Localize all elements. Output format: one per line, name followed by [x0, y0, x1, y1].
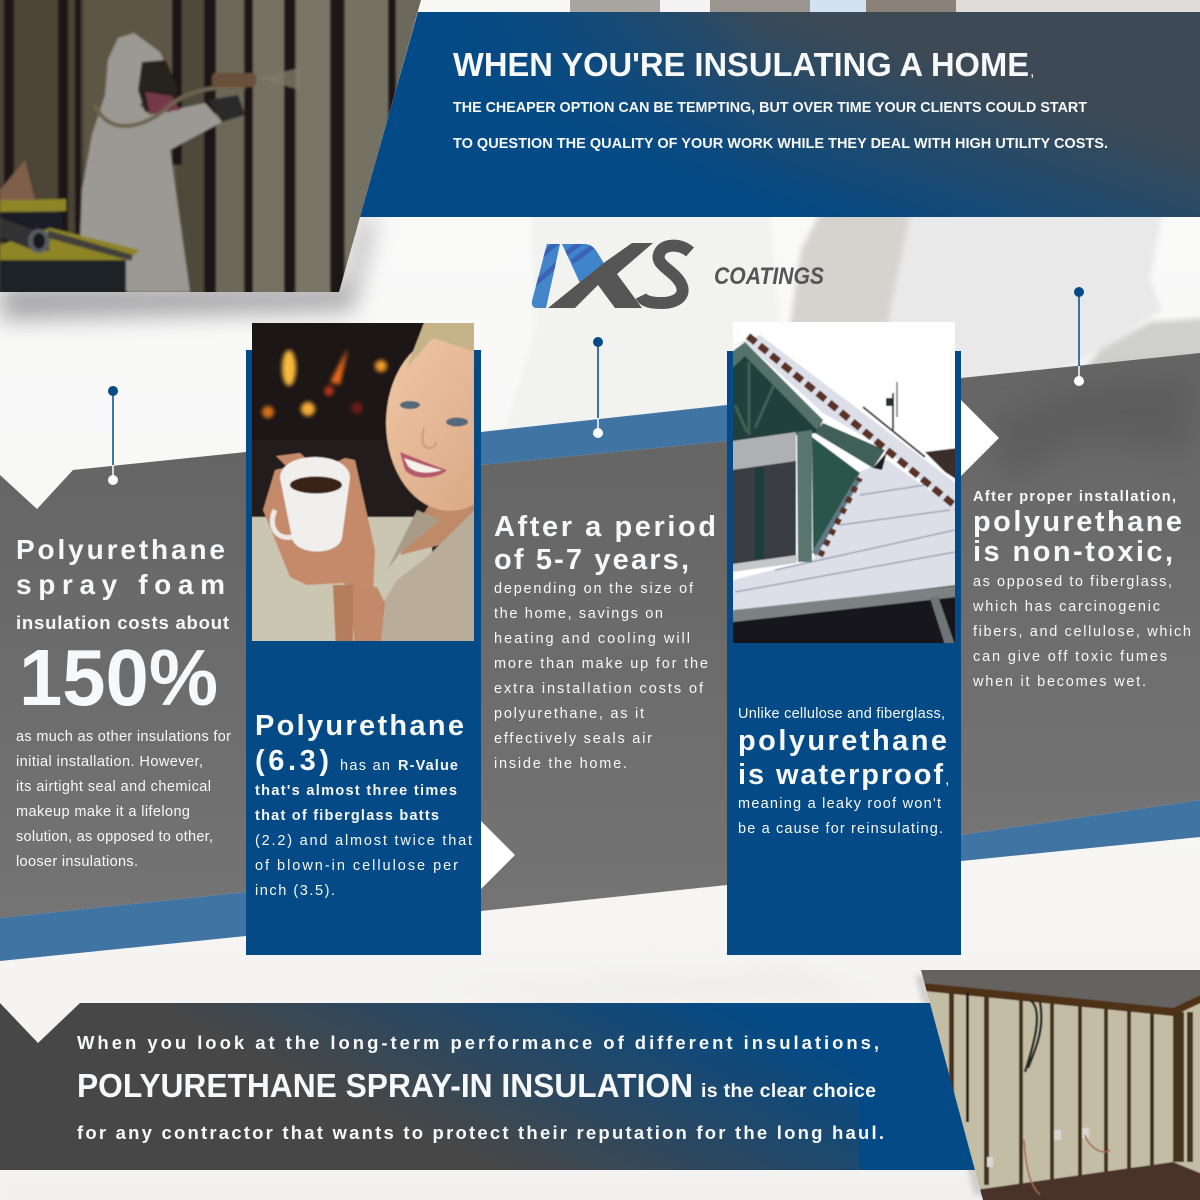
logo mark S: [641, 246, 690, 303]
headline: ,: [1030, 63, 1034, 80]
body text: its airtight seal and chemical: [16, 779, 211, 795]
heading: After proper installation,: [973, 489, 1176, 505]
logo: IXS Coatings: [528, 236, 824, 308]
robe: [380, 510, 474, 641]
body text: when it becomes wet.: [972, 674, 1146, 690]
body text: depending on the size of: [494, 581, 694, 597]
text: POLYURETHANE SPRAY-IN INSULATION: [77, 1067, 693, 1104]
worker: [80, 33, 300, 292]
text: meaning a leaky roof won't: [738, 796, 941, 812]
body text: polyurethane, as it: [494, 706, 644, 722]
body text: [16, 729, 231, 870]
body text: [255, 783, 472, 899]
body text: more than make up for the: [494, 656, 708, 672]
text: is the clear choice: [701, 1080, 876, 1102]
body text: which has carcinogenic: [972, 599, 1160, 615]
body text: as much as other insulations for: [16, 729, 231, 745]
facial features: [400, 401, 468, 478]
heading: spray foam: [16, 569, 225, 600]
connector: [108, 386, 118, 485]
logo mark X grey: [548, 243, 653, 308]
logo mark X blue: [562, 244, 604, 282]
heading: R-Value: [398, 758, 458, 774]
body text: makeup make it a lifelong: [16, 804, 190, 820]
big number: 150%: [19, 633, 218, 722]
body text: of blown-in cellulose per: [255, 858, 458, 874]
text: Unlike cellulose and fiberglass,: [738, 706, 945, 722]
body text: looser insulations.: [16, 854, 138, 870]
body text: that's almost three times: [255, 783, 457, 799]
body text: fibers, and cellulose, which: [973, 624, 1191, 640]
photo drop shadow: [0, 217, 374, 320]
heading: of 5-7 years,: [494, 544, 689, 576]
panel: R-value column: [246, 323, 481, 955]
text: is waterproof: [738, 759, 943, 791]
body text: inch (3.5).: [255, 883, 335, 899]
text: be a cause for reinsulating.: [738, 821, 943, 837]
heading: is non-toxic,: [973, 536, 1173, 568]
body text: extra installation costs of: [494, 681, 704, 697]
text: ,: [945, 771, 949, 788]
blue strip: [961, 800, 1200, 861]
heading: has an: [340, 758, 390, 774]
body text: heating and cooling will: [494, 631, 690, 647]
intro text: THE CHEAPER OPTION CAN BE TEMPTING, BUT OVER TIME YOUR CLIENTS COULD START: [453, 99, 1087, 116]
neck and chest: [400, 504, 474, 556]
blue strip: [481, 405, 727, 465]
text: polyurethane: [738, 725, 947, 757]
top photo strip: [420, 0, 1200, 12]
heading: [973, 489, 1182, 568]
heading: [255, 710, 464, 777]
heading: After a period: [494, 511, 716, 543]
panel: non-toxic grey panel: [961, 287, 1200, 861]
blue strip: [0, 892, 246, 961]
panel: payback grey panel: [481, 337, 727, 911]
body text: as opposed to fiberglass,: [973, 574, 1172, 590]
heading: Polyurethane: [255, 710, 464, 742]
arrow: [481, 821, 515, 889]
text: [77, 1032, 884, 1143]
text: [738, 706, 949, 837]
logo mark I: [532, 244, 560, 308]
text: for any contractor that wants to protect their reputation for the long haul.: [77, 1122, 884, 1143]
body text: inside the home.: [494, 756, 627, 772]
hands and arm: [263, 453, 375, 597]
panel: top headline banner: [360, 12, 1200, 217]
body text: effectively seals air: [494, 731, 652, 747]
hair: [408, 323, 474, 366]
panel: waterproof column: [725, 315, 965, 955]
body text: solution, as opposed to other,: [16, 829, 213, 845]
intro text: TO QUESTION THE QUALITY OF YOUR WORK WHILE THEY DEAL WITH HIGH UTILITY COSTS.: [453, 135, 1108, 152]
yellow bins: [0, 160, 140, 295]
panel: left grey panel: [0, 386, 246, 961]
heading: [494, 511, 716, 576]
headline: WHEN YOU'RE INSULATING A HOME: [453, 46, 1029, 83]
photo: insulated wall: [915, 965, 1200, 1200]
connector: [593, 337, 603, 438]
body text: that of fiberglass batts: [255, 808, 439, 824]
heading: insulation costs about: [16, 612, 229, 633]
heading: [16, 534, 229, 633]
body text: can give off toxic fumes: [973, 649, 1167, 665]
body text: [494, 581, 708, 772]
body text: (2.2) and almost twice that: [255, 833, 472, 849]
logo wordmark: COATINGS: [714, 263, 824, 290]
panel: bottom conclusion banner: [0, 1003, 975, 1170]
heading: (6.3): [255, 745, 329, 777]
body text: [972, 574, 1191, 690]
face: [385, 338, 474, 512]
photo: worker spraying foam: [0, 0, 435, 295]
mug: [272, 457, 350, 552]
body text: initial installation. However,: [16, 754, 203, 770]
photo: woman with coffee: [252, 323, 474, 641]
heading: Polyurethane: [16, 534, 225, 565]
intro text: [453, 99, 1108, 152]
photo: snowy roof: [733, 322, 955, 643]
connector: [1074, 287, 1084, 386]
shadow beside wall photo: [915, 975, 985, 1195]
arrow: [961, 400, 999, 476]
heading: polyurethane: [973, 506, 1182, 538]
body text: the home, savings on: [494, 606, 663, 622]
text: When you look at the long-term performance of different insulations,: [77, 1032, 879, 1053]
